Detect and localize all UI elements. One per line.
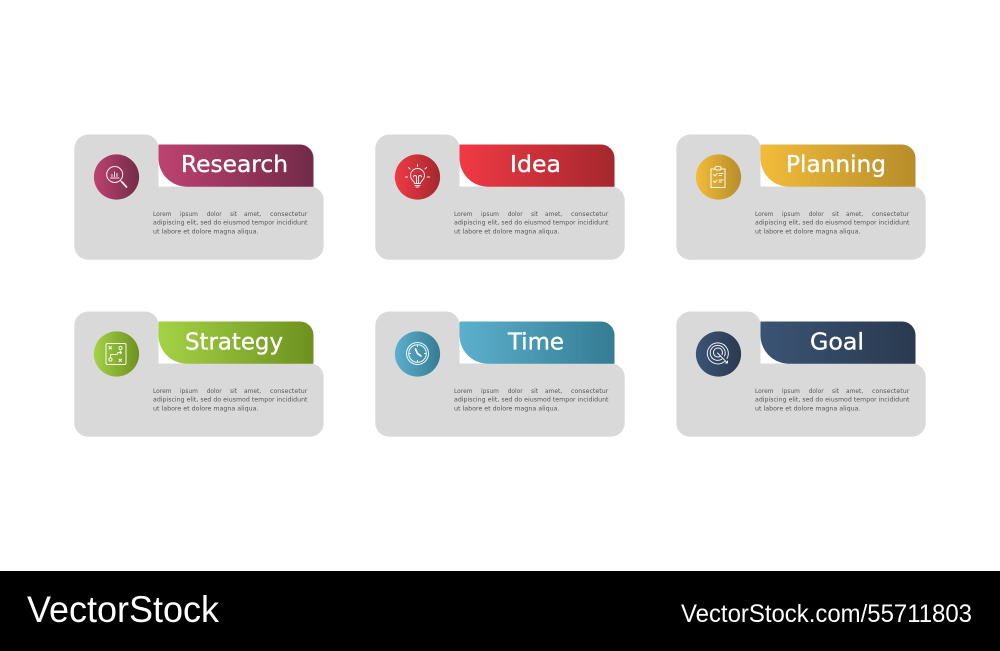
body text: ipsum <box>782 389 800 395</box>
body text: dolor <box>207 389 222 395</box>
icon: target with arrow <box>696 331 741 377</box>
body text: adipiscing elit, sed do eiusmod tempor incididunt <box>153 398 308 404</box>
body text: consectetur <box>270 389 308 395</box>
body text: sit <box>230 389 238 395</box>
body text: consectetur <box>270 212 308 218</box>
body text: ut labore et dolore magna aliqua. <box>454 406 560 412</box>
body text: ut labore et dolore magna aliqua. <box>755 229 861 235</box>
body text: amet, <box>545 389 562 395</box>
body text: ipsum <box>481 389 499 395</box>
title ribbon <box>460 322 614 364</box>
icon: strategy board <box>94 331 139 377</box>
body text: adipiscing elit, sed do eiusmod tempor incididunt <box>454 220 609 226</box>
heading: Research <box>181 150 288 178</box>
body text: dolor <box>809 212 824 218</box>
body text: consectetur <box>571 212 609 218</box>
panel: Idea <box>375 134 625 260</box>
panel: Strategy <box>74 312 324 437</box>
card background <box>74 312 324 437</box>
footer image id: VectorStock.com/55711803 <box>681 600 972 628</box>
icon: clock <box>395 331 440 377</box>
body text: ipsum <box>180 212 198 218</box>
heading: Goal <box>810 328 864 356</box>
card background <box>74 134 324 260</box>
body text: consectetur <box>872 389 910 395</box>
panel: Planning <box>676 134 926 260</box>
body text: dolor <box>508 389 523 395</box>
body text: amet, <box>846 389 863 395</box>
body text: adipiscing elit, sed do eiusmod tempor incididunt <box>755 220 910 226</box>
body text: amet, <box>244 389 261 395</box>
body text: Lorem <box>755 212 774 218</box>
body text: ipsum <box>481 212 499 218</box>
body text: consectetur <box>571 389 609 395</box>
card background <box>375 134 625 260</box>
card background <box>375 312 625 437</box>
icon: light bulb <box>395 154 440 200</box>
body text: Lorem <box>153 389 172 395</box>
title ribbon <box>460 144 614 187</box>
body text: ut labore et dolore magna aliqua. <box>153 406 259 412</box>
icon: clipboard checklist <box>696 154 741 200</box>
title ribbon <box>158 144 314 187</box>
body text: sit <box>832 389 840 395</box>
body text: sit <box>531 212 539 218</box>
body text: adipiscing elit, sed do eiusmod tempor incididunt <box>153 220 308 226</box>
body text: amet, <box>545 212 562 218</box>
panel: Goal <box>676 312 926 437</box>
panel: Time <box>375 312 625 437</box>
body text: consectetur <box>872 212 910 218</box>
body text: ipsum <box>782 212 800 218</box>
body text: Lorem <box>755 389 774 395</box>
body text: sit <box>531 389 539 395</box>
card background <box>676 312 926 437</box>
body text: sit <box>230 212 238 218</box>
title ribbon <box>760 322 916 364</box>
title ribbon <box>760 144 916 187</box>
body text: adipiscing elit, sed do eiusmod tempor incididunt <box>755 398 910 404</box>
footer bar <box>0 571 1000 651</box>
card background <box>676 134 926 260</box>
heading: Strategy <box>185 328 283 356</box>
heading: Planning <box>786 150 886 178</box>
body text: ut labore et dolore magna aliqua. <box>454 229 560 235</box>
body text: sit <box>832 212 840 218</box>
body text: Lorem <box>153 212 172 218</box>
icon: magnifier with chart <box>94 154 139 200</box>
body text: amet, <box>244 212 261 218</box>
body text: Lorem <box>454 212 473 218</box>
heading: Idea <box>510 150 561 178</box>
panel: Research <box>74 134 324 260</box>
heading: Time <box>507 328 564 356</box>
title ribbon <box>158 322 314 364</box>
body text: dolor <box>809 389 824 395</box>
body text: ipsum <box>180 389 198 395</box>
body text: adipiscing elit, sed do eiusmod tempor incididunt <box>454 398 609 404</box>
body text: dolor <box>508 212 523 218</box>
body text: amet, <box>846 212 863 218</box>
body text: ut labore et dolore magna aliqua. <box>153 229 259 235</box>
footer logo text: VectorStock <box>27 589 219 630</box>
body text: Lorem <box>454 389 473 395</box>
body text: dolor <box>207 212 222 218</box>
body text: ut labore et dolore magna aliqua. <box>755 406 861 412</box>
